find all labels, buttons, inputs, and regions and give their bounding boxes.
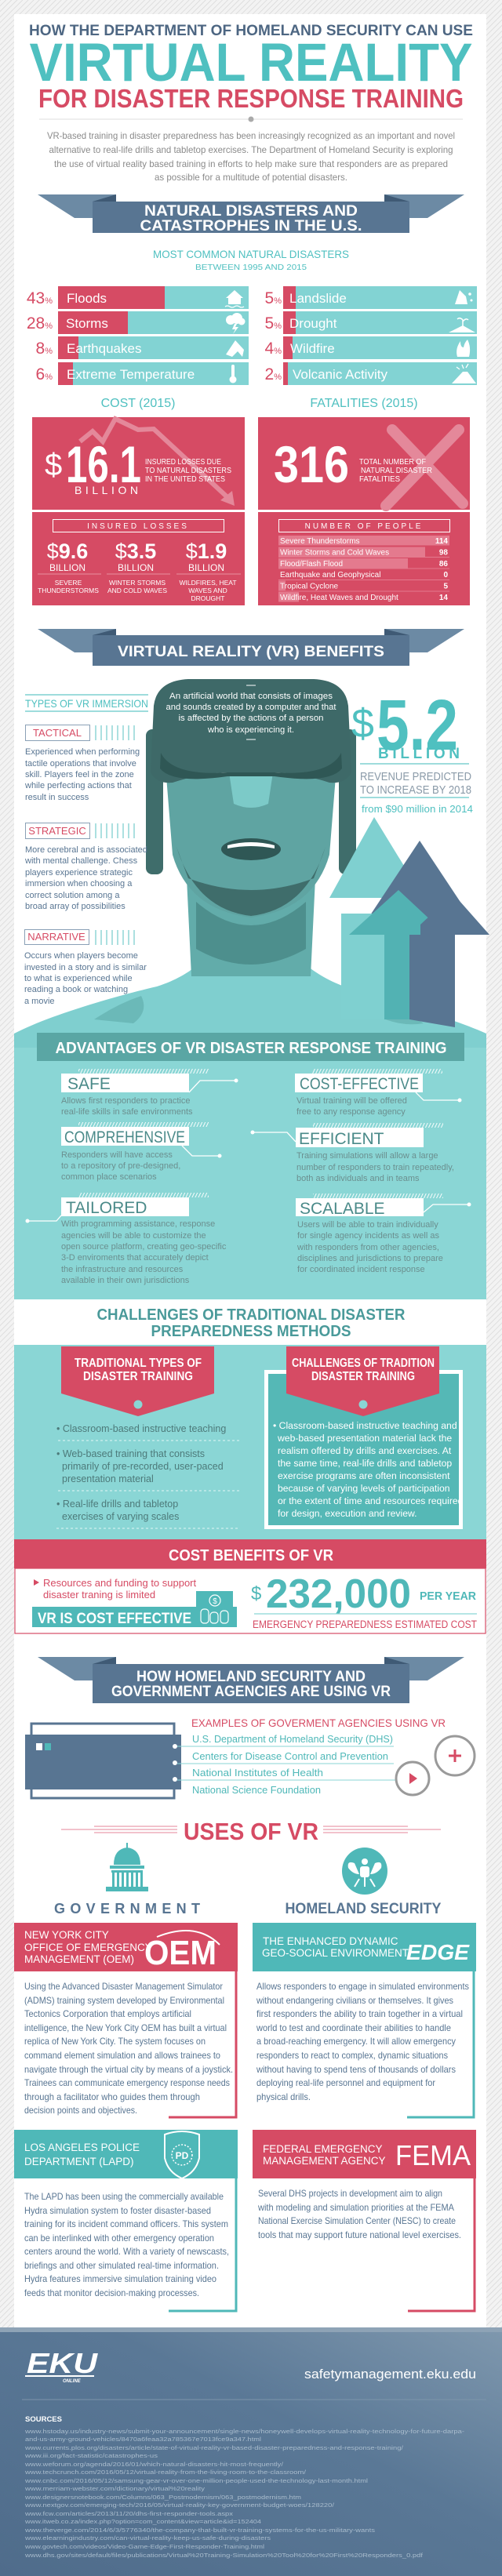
- panel: traditional types: presentation material: [62, 1473, 154, 1484]
- logo: EKU online: ONLINE: [63, 2379, 82, 2384]
- panel: traditional types: • Classroom-based instructive teaching: [56, 1423, 226, 1434]
- card: NYC OEM: Tectonics Corporation that employs artificial: [24, 2009, 191, 2019]
- bar chart: right column: Wildfire: [290, 341, 335, 356]
- advantage: comprehensive: Responders will have access: [61, 1150, 173, 1160]
- panel: traditional types: primarily of pre-recorded, user-paced: [62, 1461, 224, 1472]
- bar chart: left column: Floods: [67, 291, 107, 306]
- card: NYC OEM: [14, 1923, 238, 2117]
- card: EDGE: world to test and coordinate their abilities to handle: [256, 2023, 451, 2033]
- panel: cost benefits: Resources and funding to support: [43, 1577, 197, 1589]
- sources list: www.theverge.com/2014/6/3/5776340/the-company-that-built-vr-training-systems-for-the-us-military-wants: [24, 2527, 375, 2534]
- sources list: www.fcw.com/articles/2013/11/20/dhs-first-responder-tools.aspx: [24, 2510, 233, 2517]
- card: LAPD: Hydra simulation system to foster disaster-based: [24, 2206, 211, 2216]
- card: NYC OEM: NEW YORK CITY: [24, 1929, 109, 1941]
- bar chart: right column: 5%: [265, 289, 282, 307]
- immersion: strategic: broad array of possibilities: [25, 902, 126, 911]
- advantage: comprehensive: to a repository of pre-designed,: [61, 1161, 180, 1171]
- callout: VR definition: who is experiencing it.: [207, 725, 294, 735]
- icons right: [449, 290, 476, 383]
- list: example agencies: National Science Foundation: [192, 1784, 321, 1796]
- panel: insured losses breakdown: INSURED LOSSES: [87, 522, 189, 531]
- panel: challenges background: [14, 1345, 486, 1539]
- bar chart: right column: 5%: [265, 314, 282, 332]
- card: NYC OEM: Using the Advanced Disaster Management Simulator: [24, 1982, 223, 1992]
- bar chart: left column: 43%: [27, 289, 53, 307]
- advantage: comprehensive: [61, 1122, 221, 1182]
- logo: OEM: OEM: [144, 1934, 216, 1972]
- advantage: cost-effective: [295, 1069, 461, 1117]
- bar chart: left column: 28%: [27, 314, 53, 332]
- panel: cost benefits: EMERGENCY PREPAREDNESS ESTIMATED COST: [253, 1619, 477, 1630]
- panel: number of people table: Severe Thunderstorms: [280, 537, 360, 546]
- intro paragraph: [47, 130, 455, 183]
- panel: number of people table: Winter Storms and Cold Waves: [280, 549, 389, 557]
- panel: cost main: 16.1: [66, 435, 141, 493]
- list: example agencies: U.S. Department of Homeland Security (DHS): [192, 1733, 393, 1745]
- advantage: efficient: Training simulations will allow a large: [296, 1151, 438, 1161]
- advantage: efficient: both as individuals and in teams: [296, 1174, 420, 1183]
- panel: number of people table: 114: [435, 537, 448, 546]
- intro paragraph: as possible for a multitude of potential disasters.: [155, 172, 347, 183]
- panel: number of people table: 86: [439, 560, 448, 569]
- card: LAPD: The LAPD has been using the commercially available: [24, 2192, 224, 2202]
- panel: insured losses breakdown: DROUGHT: [191, 594, 224, 602]
- stat: 5.2 billion revenue: $: [351, 701, 374, 747]
- panel: challenges of tradition: exercise programs are often inconsistent: [278, 1470, 450, 1481]
- icon: capitol: [106, 1843, 148, 1891]
- card: NYC OEM: replica of New York City. The system focuses on: [24, 2036, 206, 2047]
- bar chart: left column: Storms: [66, 316, 108, 331]
- banner: how agencies use VR: [38, 1657, 464, 1703]
- immersion: tactical: tactile operations that involve: [25, 759, 136, 768]
- advantage: tailored: available in their own jurisdictions: [61, 1276, 190, 1285]
- card: FEMA: FEMA: [395, 2139, 471, 2171]
- heading: cost benefits of VR: COST BENEFITS OF VR: [169, 1547, 334, 1564]
- sources list: www.currents.plos.org/disasters/article/state-of-virtual-reality-vr-based-disaster-preparedness-and-response-training/: [24, 2444, 404, 2451]
- heading: advantages: ADVANTAGES OF VR DISASTER RESPONSE TRAINING: [55, 1040, 447, 1057]
- panel: number of people table: [258, 512, 470, 605]
- panel: cost benefits: VR IS COST EFFECTIVE: [38, 1611, 191, 1627]
- banner: how agencies use VR: HOW HOMELAND SECURITY AND: [136, 1669, 366, 1685]
- panel: insured losses breakdown: BILLION: [49, 562, 85, 573]
- advantage: tailored: With programming assistance, response: [61, 1219, 215, 1229]
- heading: cost / fatalities: COST (2015): [101, 397, 175, 410]
- panel: insured losses breakdown: BILLION: [188, 562, 224, 573]
- bar chart: right column: 4%: [265, 340, 282, 358]
- card: NYC OEM: intelligence, the New York City OEM has built a virtual: [24, 2023, 227, 2033]
- panel: cost main: BILLION: [75, 484, 138, 496]
- card: FEMA: tools that may support future national level exercises.: [258, 2230, 461, 2240]
- panel: number of people table: 14: [439, 594, 448, 602]
- advantage: safe: SAFE: [67, 1075, 111, 1093]
- card: NYC OEM: MANAGEMENT (OEM): [24, 1953, 134, 1965]
- banner: natural disasters: [38, 194, 464, 234]
- bar chart: right column: Volcanic Activity: [293, 367, 387, 382]
- bar chart: right column: 2%: [265, 365, 282, 383]
- panel: fatalities main: FATALITIES: [359, 475, 400, 484]
- illustration: person wearing VR headset: [14, 679, 486, 1048]
- title: VIRTUAL REALITY: [30, 32, 472, 93]
- card: EDGE: first responders the ability to train together in a virtual: [256, 2009, 463, 2019]
- card: EDGE: a broad-reaching emergency. It will allow emergency: [256, 2036, 456, 2047]
- panel: fatalities main: TOTAL NUMBER OF: [359, 458, 426, 467]
- sources list: www.cnbc.com/2016/05/12/samsung-gear-vr-over-one-million-people-used-the-technology-last-month.html: [24, 2477, 368, 2484]
- heading: cost / fatalities: FATALITIES (2015): [310, 397, 418, 410]
- icon: play circle: [396, 1762, 429, 1795]
- sources list: www.merriam-webster.com/dictionary/virtual%20reality: [24, 2485, 205, 2492]
- banner: natural disasters: NATURAL DISASTERS AND: [144, 203, 358, 220]
- card: LAPD: training for its incident command officers. This system: [24, 2219, 228, 2229]
- card: NYC OEM: through a facilitator who guides them through: [24, 2092, 200, 2102]
- heading: cost / fatalities: [101, 397, 418, 410]
- panel: cost benefits: [15, 1568, 486, 1633]
- card: LAPD: Hydra features immersive simulation training video: [24, 2274, 216, 2284]
- banner: how agencies use VR: GOVERNMENT AGENCIES ARE USING VR: [111, 1684, 391, 1700]
- panel: traditional types: [56, 1346, 240, 1528]
- card: LAPD: feeds that monitor decision-making processes.: [24, 2288, 199, 2298]
- panel: cost benefits: 232,000: [266, 1571, 411, 1617]
- panel: insured losses breakdown: SEVERE: [55, 579, 82, 587]
- advantage: cost-effective: COST-EFFECTIVE: [300, 1075, 419, 1093]
- panel: cost main: INSURED LOSSES DUE: [145, 458, 221, 467]
- panel: challenges of tradition: CHALLENGES OF TRADITION: [292, 1357, 435, 1370]
- icon: police badge: [165, 2131, 199, 2178]
- callout: VR definition: An artificial world that consists of images: [169, 692, 333, 701]
- bar chart: left column: 8%: [36, 340, 53, 358]
- list: example agencies: Centers for Disease Control and Prevention: [192, 1750, 388, 1762]
- card: LAPD: [14, 2130, 238, 2311]
- heading: advantages: [37, 1033, 464, 1061]
- advantage: safe: [61, 1069, 238, 1117]
- sources list: www.itweb.co.za/index.php?option=com_content&view=article&id=152404: [24, 2518, 261, 2525]
- panel: number of people table: Tropical Cyclone: [280, 582, 339, 591]
- bar chart: left column: Earthquakes: [67, 341, 141, 356]
- immersion: strategic: [24, 823, 147, 911]
- panel: number of people table: Earthquake and Geophysical: [280, 571, 380, 580]
- immersion: strategic: STRATEGIC: [28, 825, 86, 837]
- icon: police badge: PD: [176, 2150, 189, 2161]
- immersion: tactical: result in success: [25, 793, 89, 802]
- card: NYC OEM: decision points and objectives.: [24, 2105, 137, 2116]
- panel: challenges of tradition: or the extent of time and resources required: [278, 1495, 463, 1506]
- card: LAPD: DEPARTMENT (LAPD): [24, 2156, 134, 2167]
- panel: cost main: TO NATURAL DISASTERS: [145, 467, 231, 475]
- panel: insured losses breakdown: $1.9: [186, 540, 227, 563]
- subheading: most common disasters: MOST COMMON NATURAL DISASTERS: [153, 248, 349, 260]
- advantage: scalable: [296, 1194, 471, 1274]
- card: EDGE: responders to react to complex, dynamic situations: [256, 2051, 448, 2061]
- panel: challenges of tradition: DISASTER TRAINING: [311, 1370, 415, 1383]
- bar chart: left column: Extreme Temperature: [67, 367, 195, 382]
- advantage: cost-effective: Virtual training will be offered: [296, 1096, 407, 1106]
- intro paragraph: the use of virtual reality based training in efforts to help make sure that responders are as prepared: [54, 158, 448, 169]
- sources list: www.iii.org/fact-statistic/catastrophes-us: [24, 2452, 158, 2459]
- panel: fatalities main: [258, 417, 470, 510]
- footer: [0, 2327, 502, 2576]
- sources list: and-us-army-ground-vehicles/8470a6feaa32a785367e7013fce9a347.html: [25, 2436, 261, 2443]
- panel: challenges of tradition: realism offered by drills and exercises. At: [278, 1445, 452, 1456]
- panel: challenges of tradition: the same time, real-life drills and tabletop: [278, 1458, 452, 1469]
- card: LAPD: can be interlinked with other emergency operation: [24, 2233, 214, 2244]
- icon: plus circle: [435, 1736, 475, 1775]
- immersion: tactical: while perfecting actions that: [24, 781, 132, 790]
- title: FOR DISASTER RESPONSE TRAINING: [38, 84, 464, 113]
- card: EDGE: without endangering civilians or themselves. It gives: [256, 1996, 453, 2006]
- subheading: most common disasters: [153, 248, 349, 272]
- card: EDGE: Allows responders to engage in simulated environments: [256, 1982, 469, 1992]
- panel: insured losses breakdown: WAVES AND: [188, 587, 227, 594]
- advantage: tailored: agencies will be able to customize the: [61, 1231, 206, 1241]
- advantage: efficient: EFFICIENT: [299, 1130, 384, 1148]
- panel: traditional types: • Web-based training that consists: [56, 1448, 205, 1459]
- advantage: scalable: with responders from other agencies,: [296, 1243, 439, 1252]
- panel: cost main: [32, 417, 245, 510]
- stat: 5.2 billion revenue: from $90 million in 2014: [362, 804, 473, 815]
- immersion: narrative: to what is experienced while: [24, 974, 133, 983]
- stat: 5.2 billion revenue: TO INCREASE BY 2018: [360, 783, 471, 797]
- card: FEMA: [253, 2130, 476, 2311]
- panel: challenges of tradition: for design, execution and review.: [278, 1508, 417, 1519]
- immersion: narrative: [24, 930, 147, 1006]
- card: LAPD: briefings and other simulated real-time information.: [24, 2261, 219, 2271]
- card: EDGE: deploying real-life personnel and equipment for: [256, 2078, 435, 2088]
- title: HOW THE DEPARTMENT OF HOMELAND SECURITY CAN USE: [29, 23, 473, 39]
- panel: cost main: IN THE UNITED STATES: [145, 475, 225, 484]
- panel: traditional types: DISASTER TRAINING: [83, 1370, 193, 1383]
- heading: challenges: PREPAREDNESS METHODS: [151, 1323, 351, 1340]
- panel: challenges of tradition: [264, 1346, 463, 1529]
- panel: cost benefits: PER YEAR: [420, 1590, 476, 1603]
- advantage: efficient: number of responders to train repeatedly,: [296, 1163, 454, 1172]
- bar chart: left column: 6%: [36, 365, 53, 383]
- card: EDGE: without having to spend tens of thousands of dollars: [256, 2065, 456, 2075]
- card: NYC OEM: navigate through the virtual city by means of a joystick.: [24, 2065, 233, 2075]
- advantage: tailored: [25, 1193, 227, 1285]
- panel: insured losses breakdown: WINTER STORMS: [109, 579, 166, 587]
- card: NYC OEM: Trainees can communicate emergency response needs: [24, 2078, 230, 2088]
- sources list: www.weforum.org/agenda/2016/01/which-natural-disasters-hit-most-frequently/: [24, 2461, 284, 2468]
- panel: number of people table: Wildfire, Heat Waves and Drought: [280, 594, 398, 602]
- advantage: scalable: for coordinated incident response: [297, 1265, 425, 1274]
- callout: VR definition: [166, 692, 336, 735]
- panel: number of people table: Flood/Flash Flood: [280, 560, 343, 569]
- heading: uses of VR: USES OF VR: [184, 1818, 318, 1845]
- card: NYC OEM: OFFICE OF EMERGENCY: [24, 1942, 152, 1953]
- icon: coins: [201, 1595, 228, 1623]
- bar chart: right column: [265, 286, 477, 385]
- advantage: tailored: 3-D enviroments that accurately depict: [61, 1253, 209, 1263]
- immersion: narrative: NARRATIVE: [27, 931, 85, 943]
- logo: EKU online: EKU: [27, 2347, 98, 2379]
- advantage: comprehensive: common place scenarios: [61, 1172, 157, 1182]
- panel: challenges of tradition: • Classroom-based instructive teaching and: [273, 1420, 457, 1431]
- panel: insured losses breakdown: $9.6: [47, 540, 88, 563]
- intro paragraph: VR-based training in disaster preparedness has been increasingly recognized as an important and novel: [47, 130, 455, 141]
- stat: 5.2 billion revenue: [351, 685, 473, 815]
- sources list: www.designersnotebook.com/Columns/063_Postmodernism/063_postmodernism.htm: [24, 2494, 301, 2501]
- card: EDGE: THE ENHANCED DYNAMIC: [263, 1935, 398, 1947]
- illustration: device: [25, 1724, 181, 1798]
- advantage: tailored: TAILORED: [66, 1199, 147, 1217]
- heading: government: GOVERNMENT: [54, 1901, 200, 1917]
- immersion: tactical: skill. Players feel in the zone: [25, 770, 134, 779]
- panel: cost main: $: [45, 448, 62, 482]
- heading: challenges: [97, 1306, 406, 1340]
- card: NYC OEM: (ADMS) training system developed by Environmental: [24, 1996, 224, 2006]
- card: EDGE: GEO-SOCIAL ENVIRONMENT: [262, 1947, 409, 1959]
- advantage: tailored: open source platform, creating geo-specific: [61, 1242, 227, 1252]
- stat: 5.2 billion revenue: BILLION: [378, 746, 460, 762]
- callout: VR definition: and sounds created by a computer and that: [166, 703, 336, 712]
- card: FEMA: Several DHS projects in development aim to align: [258, 2189, 442, 2199]
- banner: VR benefits: [38, 629, 464, 666]
- intro paragraph: alternative to real-life drills and tabletop exercises. The Department of Homeland Security is exploring: [49, 144, 453, 155]
- immersion: strategic: correct solution among a: [25, 891, 120, 900]
- bar chart: right column: Landslide: [289, 291, 347, 306]
- immersion: narrative: reading a book or watching: [24, 985, 128, 994]
- advantage: tailored: the infrastructure and resources: [61, 1265, 184, 1274]
- list: example agencies: National Institutes of Health: [192, 1767, 323, 1778]
- immersion: tactical: TACTICAL: [33, 727, 82, 739]
- immersion: tactical: Experienced when performing: [25, 747, 140, 757]
- stat: 5.2 billion revenue: REVENUE PREDICTED: [360, 770, 471, 783]
- card: NYC OEM: command element simulation and allows trainees to: [24, 2051, 220, 2061]
- panel: insured losses breakdown: THUNDERSTORMS: [38, 587, 99, 594]
- panel: traditional types: exercises of varying scales: [62, 1511, 179, 1522]
- panel: number of people table: 98: [439, 549, 448, 557]
- card: LAPD: centers around the world. With a variety of newscasts,: [24, 2247, 229, 2257]
- advantage: safe: real-life skills in safe environments: [61, 1107, 193, 1117]
- panel: insured losses breakdown: WILDFIRES, HEAT: [179, 579, 237, 587]
- panel: insured losses breakdown: AND COLD WAVES: [107, 587, 167, 594]
- advantage: efficient: [251, 1123, 454, 1183]
- sources list: SOURCES: [25, 2415, 62, 2424]
- immersion: strategic: with mental challenge. Chess: [24, 856, 138, 866]
- icon: coins: $: [213, 1597, 217, 1606]
- panel: traditional types: TRADITIONAL TYPES OF: [75, 1357, 202, 1370]
- panel: number of people table: 5: [443, 582, 448, 591]
- heading: homeland security: HOMELAND SECURITY: [286, 1901, 442, 1917]
- sources list: www.techcrunch.com/2016/05/12/virtual-reality-from-the-living-room-to-the-classroom/: [24, 2469, 307, 2476]
- immersion: narrative: invested in a story and is similar: [24, 963, 147, 972]
- title: [29, 23, 473, 113]
- panel: insured losses breakdown: BILLION: [118, 562, 154, 573]
- card: FEMA: FEDERAL EMERGENCY: [263, 2143, 383, 2155]
- subheading: most common disasters: BETWEEN 1995 AND 2015: [195, 263, 307, 272]
- list: example agencies: EXAMPLES OF GOVERMENT AGENCIES USING VR: [191, 1717, 446, 1729]
- panel: cost benefits: $: [251, 1583, 261, 1604]
- heading: challenges: CHALLENGES OF TRADITIONAL DISASTER: [97, 1306, 406, 1324]
- panel: advantages background: [14, 1035, 486, 1299]
- panel: number of people table: 0: [443, 571, 448, 580]
- advantage: scalable: for single agency incidents as well as: [297, 1231, 439, 1241]
- callout: VR definition: is affected by the actions of a person: [179, 714, 323, 723]
- card: FEMA: MANAGEMENT AGENCY: [263, 2155, 386, 2167]
- sources list: www.hstoday.us/industry-news/submit-your-announcement/single-news/honeywell-develops-virtual-reality-technology-for-future-darpa-: [24, 2428, 465, 2435]
- advantage: safe: Allows first responders to practice: [61, 1096, 190, 1106]
- banner: VR benefits: VIRTUAL REALITY (VR) BENEFITS: [118, 644, 384, 660]
- sources list: www.elearningindustry.com/can-virtual-reality-keep-us-safe-during-disasters: [24, 2534, 271, 2541]
- panel: insured losses breakdown: [32, 512, 245, 605]
- advantage: cost-effective: free to any response agency: [296, 1107, 406, 1117]
- footer: safetymanagement.eku.edu: [304, 2367, 476, 2382]
- chart: growth arrows: [329, 817, 489, 1027]
- immersion: strategic: immersion when choosing a: [25, 879, 133, 888]
- card: LAPD: LOS ANGELES POLICE: [24, 2142, 140, 2153]
- sources list: www.nextgov.com/emerging-tech/2016/05/virtual-reality-key-government-budget-woes/128220/: [24, 2502, 335, 2509]
- heading: types of VR immersion: TYPES OF VR IMMERSION: [25, 697, 148, 710]
- bar chart: left column: [27, 286, 249, 385]
- panel: challenges of tradition: because of varying levels of participation: [278, 1483, 450, 1494]
- panel: number of people table: NUMBER OF PEOPLE: [305, 522, 423, 531]
- card: FEMA: National Exercise Simulation Center (NESC) to create: [258, 2216, 456, 2226]
- sources list: www.govtech.com/videos/Video-Game-Edge-First-Responder-Training.html: [24, 2543, 264, 2550]
- panel: traditional types: • Real-life drills and tabletop: [56, 1499, 178, 1510]
- icon: eagle seal: [342, 1848, 387, 1895]
- card: EDGE: physical drills.: [256, 2092, 311, 2102]
- panel: cost benefits: disaster traning is limited: [43, 1589, 155, 1600]
- sources list: www.dhs.gov/sites/default/files/publications/Virtual%20Training-Simulation%20Tool%20for%20First%20Responders_0.pdf: [24, 2552, 424, 2559]
- stat: 5.2 billion revenue: 5.2: [376, 685, 458, 765]
- advantage: comprehensive: COMPREHENSIVE: [64, 1128, 185, 1146]
- advantage: scalable: Users will be able to train individually: [297, 1220, 438, 1230]
- immersion: strategic: More cerebral and is associated: [25, 845, 147, 855]
- panel: insured losses breakdown: $3.5: [115, 540, 156, 563]
- card: EDGE: EDGE: [406, 1940, 470, 1964]
- sources list: [24, 2415, 465, 2559]
- immersion: tactical: [24, 725, 140, 802]
- card: FEMA: with modeling and simulation priorities at the FEMA: [257, 2203, 454, 2213]
- card: EDGE: [253, 1923, 476, 2117]
- bar chart: right column: Drought: [289, 316, 337, 331]
- icons left: [225, 290, 245, 383]
- panel: fatalities main: 316: [274, 435, 349, 493]
- immersion: strategic: players experience strategic: [25, 868, 133, 877]
- list: example agencies: [177, 1717, 446, 1796]
- banner: natural disasters: CATASTROPHES IN THE U.S.: [140, 218, 362, 234]
- advantage: scalable: SCALABLE: [300, 1200, 385, 1218]
- panel: fatalities main: NATURAL DISASTER: [361, 467, 432, 475]
- heading: cost benefits of VR: [14, 1539, 486, 1568]
- immersion: narrative: a movie: [24, 997, 55, 1006]
- panel: challenges of tradition: web-based presentation material lack the: [277, 1433, 452, 1444]
- advantage: scalable: disciplines and jurisdictions to prepare: [297, 1254, 443, 1263]
- immersion: narrative: Occurs when players become: [24, 951, 138, 961]
